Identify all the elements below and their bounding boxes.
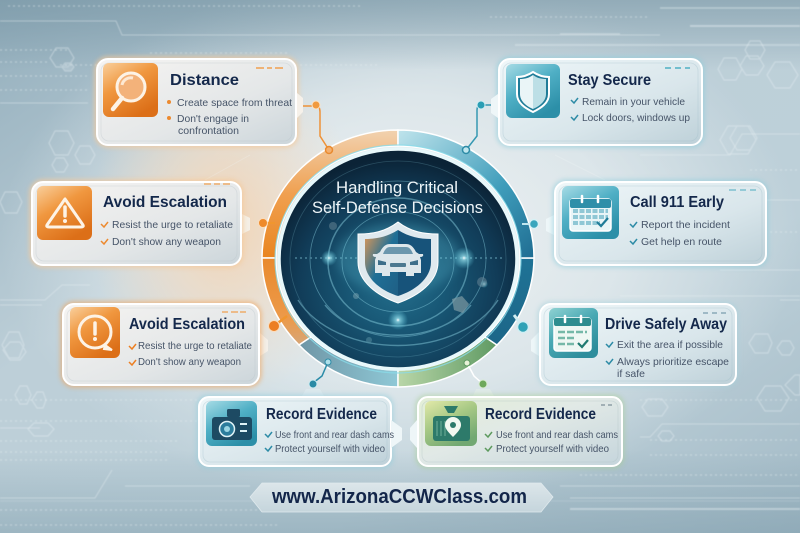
disc rings and light — [290, 161, 506, 357]
heading: avoid escalation upper: Avoid Escalation — [103, 194, 227, 211]
icon: location dash camera — [425, 401, 477, 446]
central dial — [262, 130, 534, 387]
outer ring: slate lower-left segment — [299, 337, 398, 387]
heading: center title: Handling Critical — [336, 179, 458, 197]
central disc — [279, 149, 517, 369]
bullet list: call 911 early: Report the incident — [641, 219, 730, 231]
bullet list: drive safely away: Exit the area if possible — [617, 339, 723, 351]
bullet list: distance — [167, 97, 292, 137]
outer ring: dark blue lower-right segment — [485, 258, 534, 345]
connector: record evidence right — [464, 360, 494, 396]
bullet list: distance: confrontation — [178, 125, 239, 137]
icon: calendar — [562, 186, 619, 239]
icon: calendar green — [549, 308, 598, 358]
panel: record evidence right — [410, 394, 625, 469]
heading: record evidence right: Record Evidence — [485, 406, 596, 423]
connector: stay secure — [462, 101, 494, 154]
panel: call 911 early — [552, 179, 769, 268]
bullet list: record evidence right: Use front and rear dash cams — [496, 429, 618, 441]
bullet list: record evidence right — [485, 429, 618, 455]
outer ring: green lower-right segment — [398, 337, 497, 387]
icon: magnifying glass — [103, 63, 158, 117]
panel: stay secure — [491, 56, 705, 148]
connector: avoid escalation lower — [260, 316, 287, 356]
bullet list: stay secure — [571, 96, 690, 124]
bullet list: stay secure: Remain in your vehicle — [582, 96, 685, 108]
icon: shield — [506, 64, 560, 118]
bullet list: record evidence left: Protect yourself with video — [275, 443, 385, 455]
heading: record evidence left: Record Evidence — [266, 406, 377, 423]
connector: drive safely away — [514, 315, 539, 356]
bullet list: call 911 early — [630, 219, 730, 248]
icon: dash camera — [206, 401, 257, 446]
heading: center title: Self-Defense Decisions — [312, 199, 483, 217]
bullet list: distance: Create space from threat — [177, 97, 292, 109]
panel: drive safely away — [537, 301, 739, 388]
heading: distance: Distance — [170, 72, 239, 89]
connector: distance — [303, 101, 332, 154]
website banner: www.ArizonaCCWClass.com — [271, 486, 527, 508]
heading: drive safely away: Drive Safely Away — [605, 316, 727, 333]
bullet list: avoid escalation upper: Don't show any weapon — [112, 236, 221, 248]
icon: warning triangle — [37, 186, 92, 240]
bullet list: avoid escalation upper: Resist the urge to retaliate — [112, 219, 233, 231]
bullet list: distance: Don't engage in — [177, 113, 249, 125]
bullet list: avoid escalation lower — [129, 340, 252, 368]
bullet list: call 911 early: Get help en route — [641, 236, 722, 248]
connector: avoid escalation upper — [242, 214, 275, 234]
connector: record evidence left — [302, 359, 331, 396]
icon: shield with car — [358, 222, 438, 303]
panel: avoid escalation lower — [60, 301, 262, 388]
outer ring: blue upper-right segment — [398, 130, 534, 258]
bullet list: drive safely away: Always prioritize escape — [617, 356, 729, 368]
bullet list: drive safely away: if safe — [617, 368, 645, 380]
panel: avoid escalation upper — [29, 179, 244, 268]
panel: record evidence left — [196, 394, 402, 469]
outer ring: orange lower-left segment — [262, 258, 311, 345]
bullet list: avoid escalation upper — [101, 219, 233, 248]
heading: stay secure: Stay Secure — [568, 72, 651, 89]
connector: call 911 — [522, 215, 554, 235]
bullet list: drive safely away — [606, 339, 729, 380]
bullet list: record evidence left — [265, 429, 394, 455]
icon: speech bubble alert — [70, 307, 120, 358]
heading: center title — [312, 179, 483, 217]
panel: distance — [94, 56, 303, 148]
bullet list: stay secure: Lock doors, windows up — [582, 112, 690, 124]
heading: call 911 early: Call 911 Early — [630, 194, 724, 211]
bullet list: record evidence right: Protect yourself with video — [496, 443, 609, 455]
bullet list: avoid escalation lower: Resist the urge to retaliate — [138, 340, 252, 352]
website banner — [250, 483, 553, 512]
bullet list: record evidence left: Use front and rear dash cams — [275, 429, 394, 441]
heading: avoid escalation lower: Avoid Escalation — [129, 316, 245, 333]
outer ring: orange upper-left segment — [262, 130, 398, 258]
bullet list: avoid escalation lower: Don't show any weapon — [138, 356, 241, 368]
